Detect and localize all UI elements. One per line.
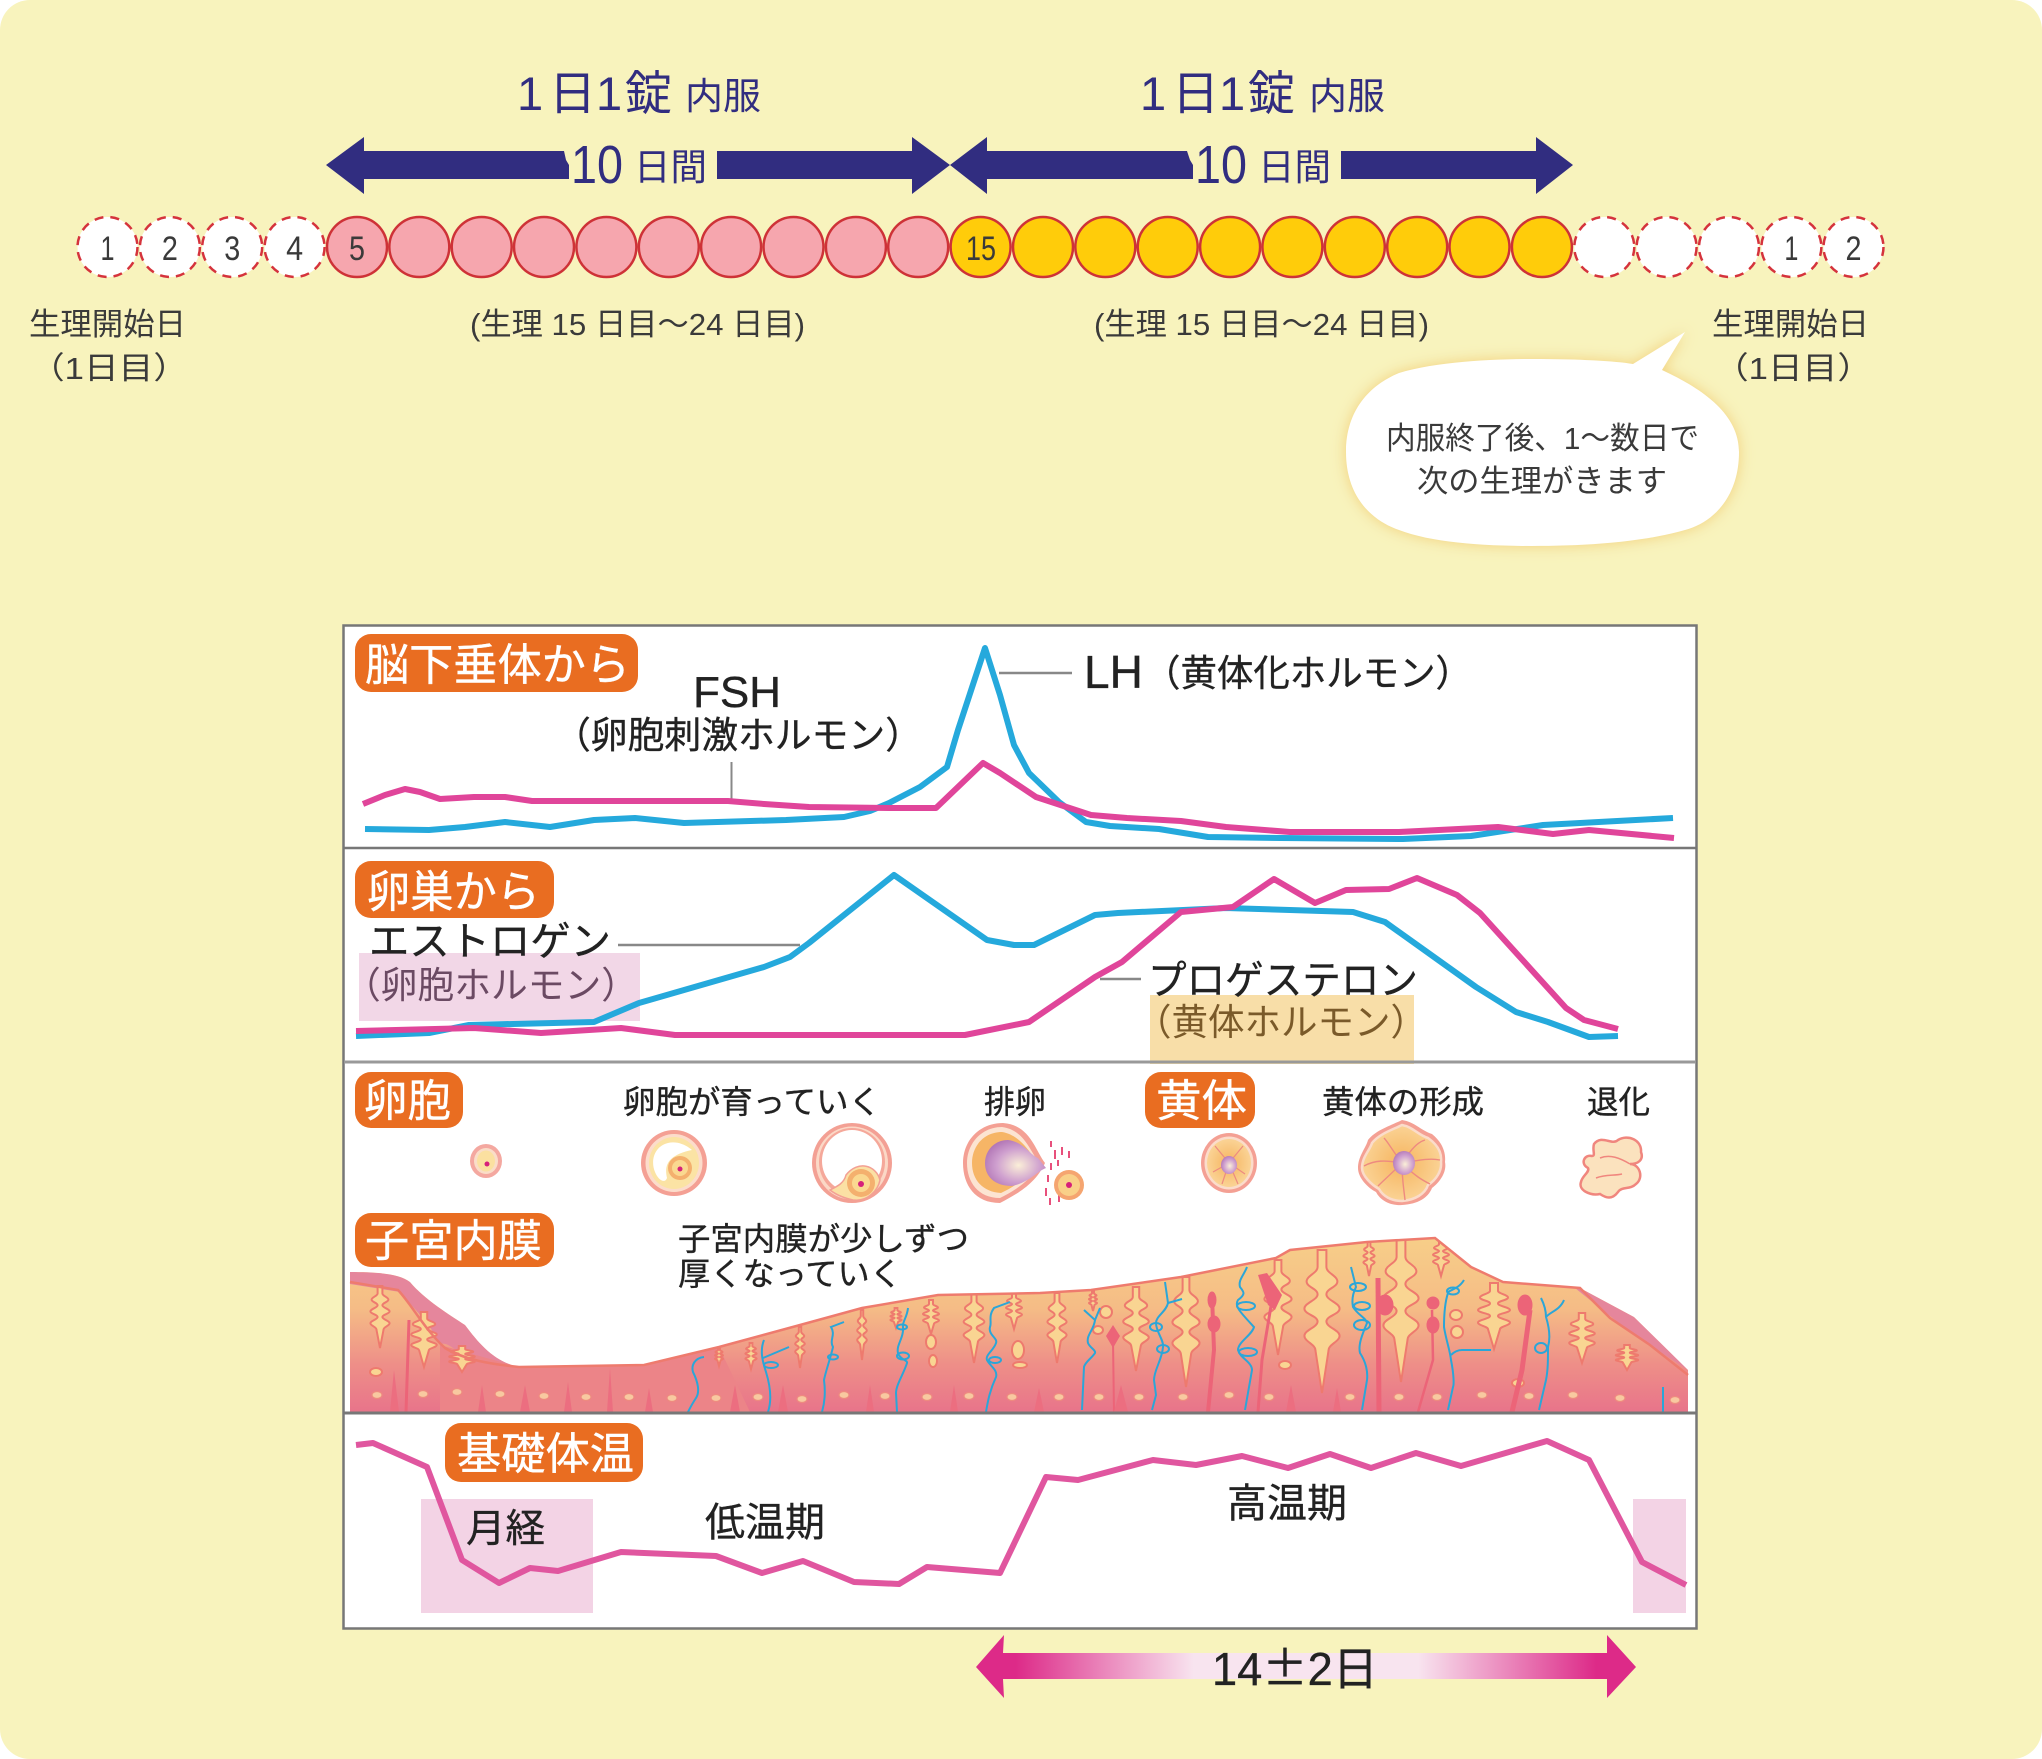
label: LH: LH bbox=[1084, 646, 1143, 698]
day numbers: 3 bbox=[224, 230, 240, 268]
dosage title: second course: 錠 bbox=[1248, 67, 1295, 120]
label: period start left: 生理開始日 bbox=[29, 307, 186, 342]
icon: mature follicle bbox=[812, 1123, 892, 1203]
lower layer low region bbox=[440, 1345, 750, 1412]
badge: pituitary: 脳下垂体から bbox=[365, 641, 630, 690]
day numbers bbox=[100, 230, 1862, 268]
arteries bbox=[406, 1273, 1532, 1412]
label: estrogen bbox=[344, 920, 638, 1006]
dosage title: second course: 1 bbox=[1140, 67, 1166, 120]
label: period start left bbox=[29, 307, 188, 386]
label: estrogen: エストロゲン bbox=[369, 920, 611, 964]
label: period start right: 生理開始日 bbox=[1712, 307, 1869, 342]
curve: estrogen bbox=[356, 875, 1618, 1037]
label: progesterone bbox=[1135, 959, 1427, 1043]
illustration: endometrium cross-section bbox=[348, 1236, 1690, 1414]
callout bubble: 内服終了後、1〜数日で bbox=[1386, 421, 1699, 456]
icon: early corpus luteum bbox=[1201, 1133, 1257, 1193]
callout bubble: 次の生理がきます bbox=[1417, 464, 1667, 499]
day circles: pink tablets days 5-14 bbox=[327, 217, 948, 277]
curve: temperature bbox=[356, 1441, 1686, 1585]
label: high temperature phase: 高温期 bbox=[1227, 1482, 1347, 1526]
day circles: menstruation start days bbox=[78, 217, 325, 277]
label: period start right: （1日目） bbox=[1714, 351, 1872, 386]
label: low temperature phase: 低温期 bbox=[705, 1501, 825, 1545]
label: days range second: (生理 15 日目〜24 日目) bbox=[1094, 307, 1429, 342]
arrow: first 10 days: 日間 bbox=[634, 147, 707, 188]
cells bbox=[372, 1388, 1680, 1404]
vessels bbox=[688, 1267, 1663, 1412]
panel: follicle and endometrium bbox=[348, 1072, 1690, 1414]
dosage title: second course: 日 bbox=[1172, 67, 1219, 120]
day circles: after course bbox=[1574, 217, 1884, 277]
arrow: 14 plus or minus 2 days bbox=[976, 1633, 1636, 1699]
shedding layer right bbox=[1575, 1288, 1688, 1370]
label: endometrium thickening bbox=[678, 1221, 969, 1292]
label: FSH: （卵胞刺激ホルモン） bbox=[554, 715, 922, 756]
stage labels bbox=[623, 1084, 1650, 1120]
leader line: LH bbox=[999, 672, 1072, 674]
label: LH bbox=[1084, 646, 1472, 698]
curve: progesterone bbox=[356, 878, 1618, 1035]
panel: ovarian hormones bbox=[344, 861, 1618, 1064]
label: period start right bbox=[1712, 307, 1872, 386]
arrow: 14 plus or minus 2 days: 14±2日 bbox=[1212, 1633, 1378, 1699]
arrow: second 10 days: 10 bbox=[1195, 135, 1247, 195]
stage labels: 排卵 bbox=[984, 1084, 1046, 1120]
curve: LH bbox=[365, 648, 1673, 839]
highlight: follicle hormone bbox=[359, 953, 640, 1021]
icon: regressing corpus bbox=[1581, 1138, 1642, 1198]
icon: primary follicle bbox=[470, 1144, 502, 1178]
day numbers: 2 bbox=[162, 230, 178, 268]
day numbers: 4 bbox=[286, 230, 303, 268]
callout bubble bbox=[1346, 332, 1739, 546]
glands bbox=[370, 1240, 1638, 1393]
stage labels: 黄体の形成 bbox=[1322, 1084, 1484, 1120]
badge: follicle: 卵胞 bbox=[364, 1077, 451, 1126]
curve: FSH bbox=[363, 763, 1674, 838]
arrow: second 10 days bbox=[950, 135, 1573, 195]
day circles: yellow tablets days 15-24 bbox=[951, 217, 1572, 277]
day numbers: 1 bbox=[1784, 230, 1798, 268]
endometrium outline bbox=[350, 1238, 1688, 1375]
arrow: first 10 days: 10 bbox=[571, 135, 623, 195]
day numbers: 1 bbox=[100, 230, 114, 268]
leader line: progesterone bbox=[1100, 978, 1141, 980]
dosage title: first course: 内服 bbox=[685, 76, 761, 117]
shedding layer left bbox=[350, 1272, 519, 1367]
leader line: FSH bbox=[730, 762, 732, 802]
leader line: estrogen bbox=[618, 944, 800, 946]
day numbers: 5 bbox=[349, 230, 365, 268]
badge: ovary: 卵巣から bbox=[367, 868, 540, 917]
icon: growing follicle bbox=[641, 1130, 707, 1196]
badge: endometrium: 子宮内膜 bbox=[365, 1217, 542, 1266]
dosage title: first course: 1 bbox=[517, 67, 543, 120]
dosage title: second course: 1 bbox=[1219, 67, 1245, 120]
dosage title: first course bbox=[517, 67, 761, 120]
arrow: second 10 days: 日間 bbox=[1258, 147, 1331, 188]
day numbers: 15 bbox=[966, 230, 996, 268]
basal wedges bbox=[390, 1368, 1341, 1412]
panel: pituitary hormones bbox=[355, 634, 1674, 839]
label: endometrium thickening: 厚くなっていく bbox=[678, 1256, 902, 1292]
icon: ovulation bbox=[963, 1123, 1084, 1205]
dosage title: first course: 1 bbox=[596, 67, 622, 120]
label: endometrium thickening: 子宮内膜が少しずつ bbox=[678, 1221, 969, 1257]
dosage title: first course: 日 bbox=[549, 67, 596, 120]
dosage title: second course bbox=[1140, 67, 1385, 120]
highlight: menstruation bbox=[421, 1499, 593, 1613]
day numbers: 2 bbox=[1846, 230, 1862, 268]
icon: corpus luteum bbox=[1358, 1120, 1445, 1205]
label: FSH bbox=[554, 668, 922, 756]
chart panel frame bbox=[344, 626, 1696, 1628]
label: progesterone: （黄体ホルモン） bbox=[1135, 1002, 1427, 1043]
panel: basal body temperature bbox=[356, 1423, 1686, 1613]
highlight: next menstruation bbox=[1633, 1499, 1686, 1613]
stage labels: 退化 bbox=[1587, 1084, 1650, 1120]
label: estrogen: （卵胞ホルモン） bbox=[344, 965, 638, 1006]
dosage title: second course: 内服 bbox=[1309, 76, 1385, 117]
badge: corpus luteum: 黄体 bbox=[1156, 1077, 1247, 1126]
label: LH: （黄体化ホルモン） bbox=[1144, 653, 1472, 694]
label: menstruation: 月経 bbox=[466, 1508, 545, 1551]
highlight: corpus luteum hormone bbox=[1150, 995, 1414, 1064]
label: progesterone: プロゲステロン bbox=[1148, 959, 1418, 1003]
stage labels: 卵胞が育っていく bbox=[623, 1084, 881, 1120]
label: days range first: (生理 15 日目〜24 日目) bbox=[470, 307, 805, 342]
arrow: first 10 days bbox=[326, 135, 950, 195]
dosage title: first course: 錠 bbox=[625, 67, 672, 120]
label: FSH: FSH bbox=[693, 668, 781, 717]
label: period start left: （1日目） bbox=[30, 351, 188, 386]
badge: basal temperature: 基礎体温 bbox=[457, 1430, 634, 1479]
